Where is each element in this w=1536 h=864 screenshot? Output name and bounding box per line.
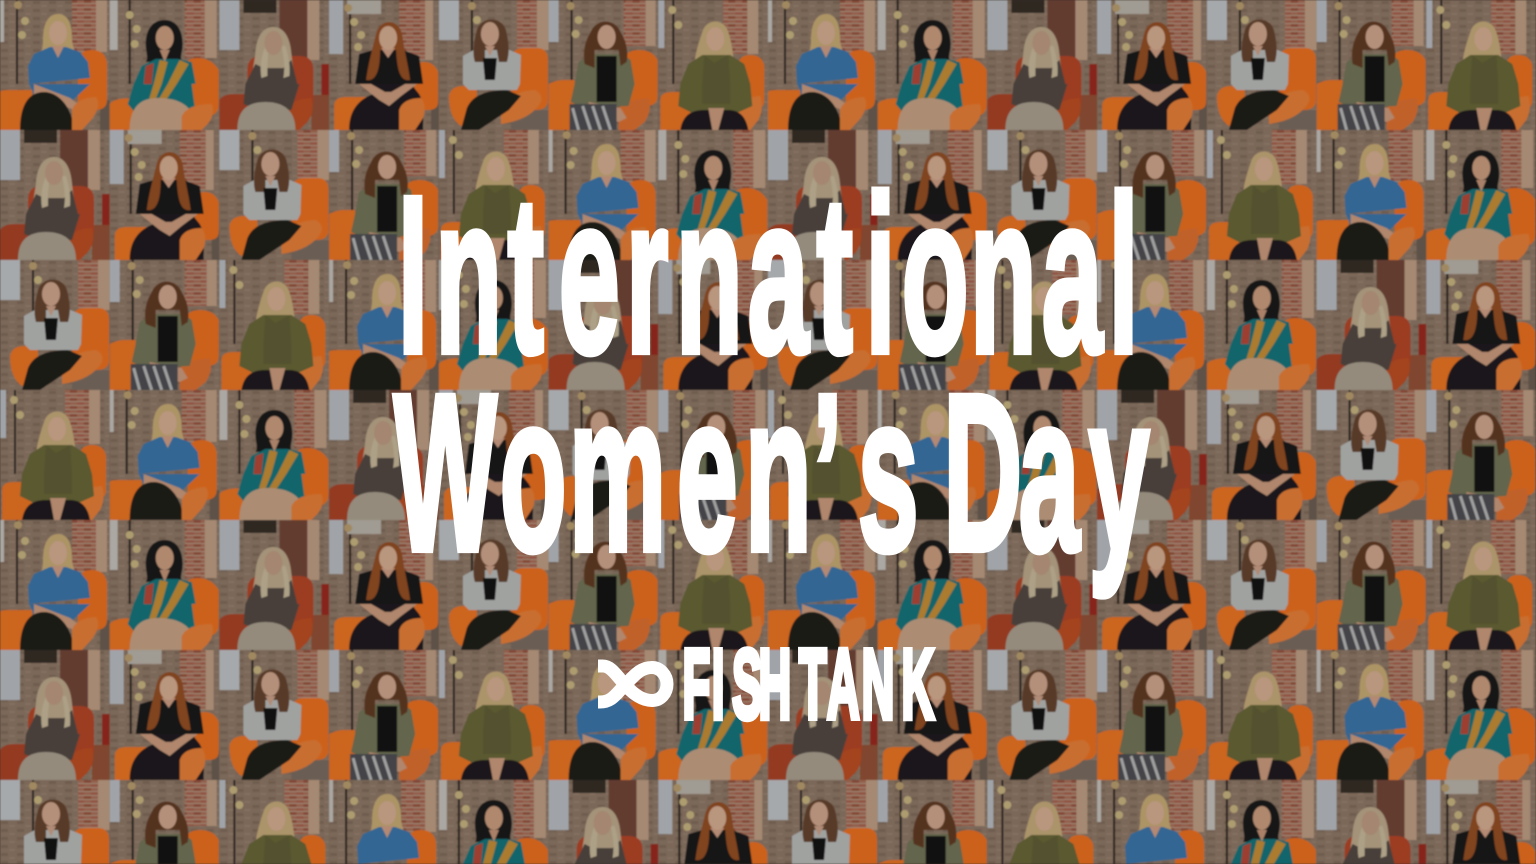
photo row 7 xyxy=(0,780,1536,864)
photo row 2 xyxy=(0,130,1536,260)
photo row 6 xyxy=(0,650,1536,780)
photo row 5 xyxy=(0,520,1536,650)
logo: Fishtank xyxy=(598,631,934,740)
photo row 1 xyxy=(0,0,1536,130)
icon: fish loop xyxy=(598,666,667,702)
photo row 3 xyxy=(0,260,1536,390)
title: International xyxy=(398,150,1139,400)
title xyxy=(393,150,1150,598)
wordmark: FISHTANK xyxy=(683,631,934,740)
photo row 4 xyxy=(0,390,1536,520)
title: Women’s Day xyxy=(393,348,1150,598)
